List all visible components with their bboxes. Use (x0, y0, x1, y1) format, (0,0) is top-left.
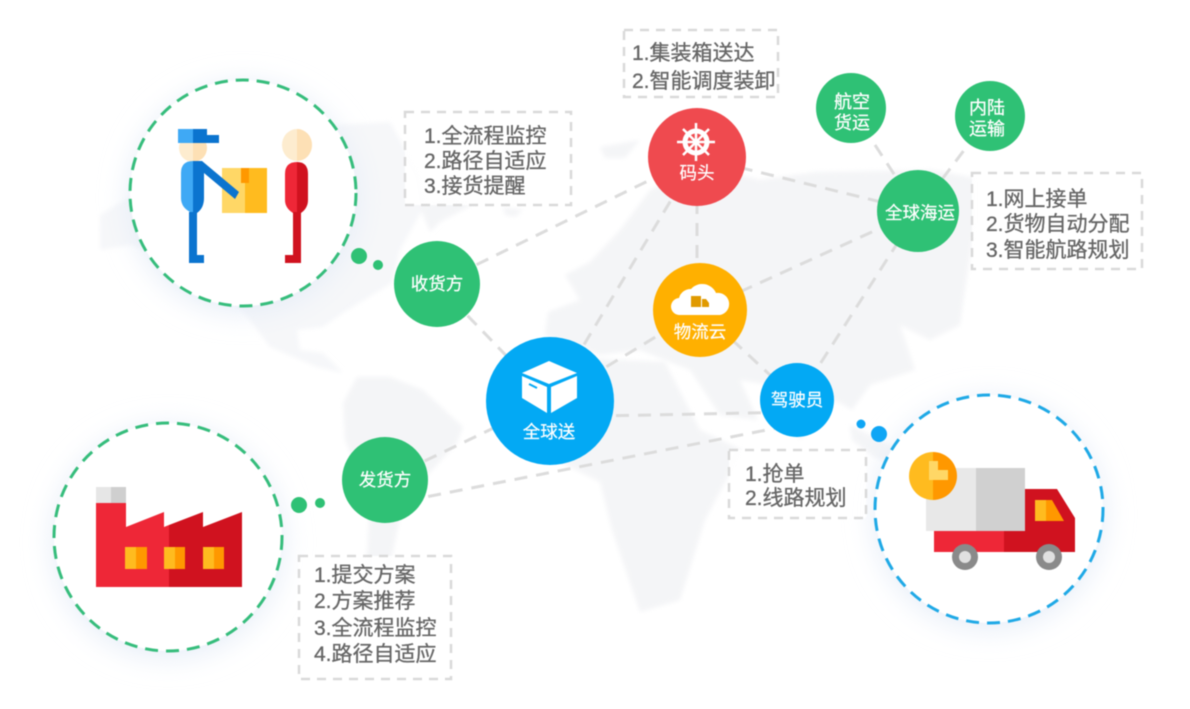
node: 驾驶员 (760, 363, 834, 437)
panel: receiver circle (130, 80, 356, 306)
icon: ship helm (677, 123, 715, 161)
panel: factory circle (54, 423, 282, 651)
node: 码头: 码头 (680, 163, 714, 183)
text block: shipper features: 4.路径自适应 (314, 643, 437, 666)
node: 航空货运: 航空 (834, 92, 870, 112)
node: 发货方: 发货方 (359, 470, 411, 490)
text block: receiver features (405, 112, 571, 205)
glow: circles (53, 84, 1104, 657)
text block: dock features: 2.智能调度装卸 (632, 70, 776, 93)
text block: ocean shipping features: 2.货物自动分配 (986, 213, 1130, 236)
node: 驾驶员: 驾驶员 (771, 390, 823, 410)
node: 收货方: 收货方 (411, 274, 463, 294)
node: 物流云: 物流云 (674, 322, 726, 342)
icon: factory (96, 487, 242, 587)
text block: shipper features (299, 556, 451, 679)
node: 物流云 (653, 263, 747, 357)
connector dots: factory (291, 497, 325, 513)
text block: ocean shipping features: 1.网上接单 (986, 188, 1088, 211)
text block: shipper features: 3.全流程监控 (314, 617, 437, 640)
icon: cardboard box (522, 361, 577, 413)
connector dots: receiver (351, 248, 383, 270)
text block: receiver features: 2.路径自适应 (424, 150, 547, 173)
text block: driver features: 1.抢单 (745, 463, 805, 486)
text block: receiver features: 1.全流程监控 (424, 125, 547, 148)
node: 发货方 (342, 437, 428, 523)
connector dots: truck (856, 420, 887, 442)
icon: delivery truck with clock (909, 452, 1075, 570)
node: 全球海运 (877, 170, 959, 252)
node: 全球海运: 全球海运 (885, 203, 955, 223)
connector lines (385, 108, 990, 505)
icon: courier delivering a parcel to a customer (178, 129, 312, 263)
node: 内陆运输: 运输 (969, 119, 1005, 139)
panel: truck circle (875, 395, 1103, 623)
text block: ocean shipping features: 3.智能航路规划 (986, 239, 1130, 262)
text block: dock features: 1.集装箱送达 (632, 42, 755, 65)
node: 全球送: 全球送 (523, 422, 575, 442)
node: 收货方 (394, 241, 480, 327)
node: 码头 (648, 108, 746, 206)
text block: driver features (729, 450, 866, 518)
text block: shipper features: 2.方案推荐 (314, 590, 416, 613)
node: 内陆运输: 内陆 (969, 98, 1005, 118)
node: 全球送 (486, 337, 614, 465)
text block: dock features (624, 30, 778, 97)
text block: driver features: 2.线路规划 (745, 487, 847, 510)
node: 航空货运: 货运 (834, 113, 870, 133)
text block: ocean shipping features (972, 173, 1142, 269)
text block: shipper features: 1.提交方案 (314, 564, 416, 587)
text block: receiver features: 3.接货提醒 (424, 175, 526, 198)
node: 航空货运 (816, 73, 886, 143)
world map background (100, 122, 975, 612)
icon: cloud with truck (671, 284, 729, 315)
node: 内陆运输 (955, 81, 1025, 151)
